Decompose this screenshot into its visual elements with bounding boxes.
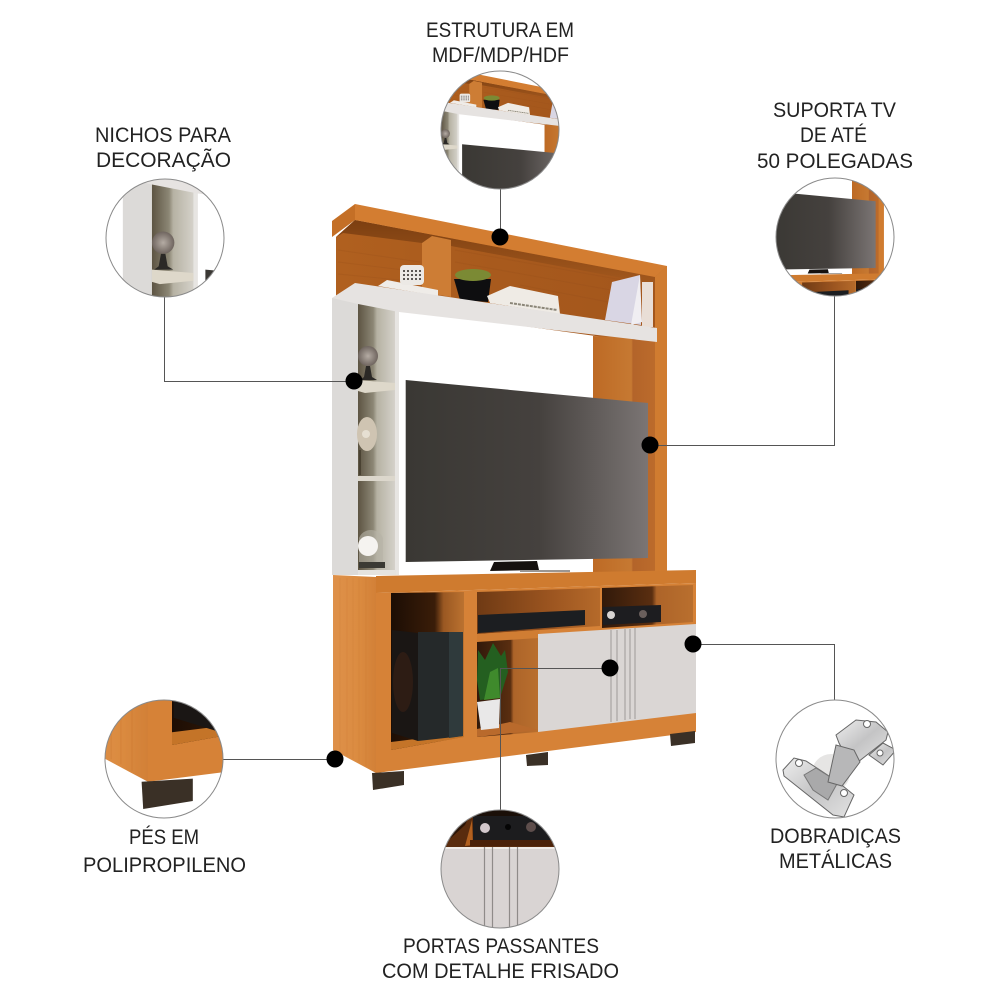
plant in white pot (477, 643, 508, 730)
callout dot: feet (326, 750, 344, 768)
detail circle: foot (104, 700, 224, 818)
heading: suporta tv: 50 POLEGADAS (757, 150, 913, 173)
right post (593, 266, 667, 572)
heading: estrutura: ESTRUTURA EM (426, 19, 574, 42)
sliding doors (538, 624, 696, 732)
callout dot: niches (346, 372, 362, 390)
cabinet front frame (376, 583, 696, 773)
middle shelf (477, 630, 540, 642)
subwoofer speaker (392, 630, 463, 741)
detail circle: TV (776, 178, 894, 296)
TV screen (406, 380, 648, 562)
stacked books (487, 286, 560, 314)
callout dot: TV (642, 436, 658, 454)
callout: dobradicas (770, 700, 901, 873)
heading: nichos: DECORAÇÃO (96, 148, 231, 172)
callout: estrutura (428, 22, 572, 190)
detail circle: niche with globe (106, 178, 224, 298)
hutch underside shadow (336, 220, 655, 284)
hutch divider (422, 236, 451, 297)
feet (372, 731, 695, 790)
shell ornament (357, 417, 377, 475)
heading: estrutura (426, 19, 574, 67)
heading: nichos (95, 124, 231, 172)
DVD player (478, 610, 585, 633)
heading: dobradicas (770, 825, 901, 873)
TV stand foot (490, 561, 539, 571)
lower cabinet (333, 570, 696, 773)
heading: suporta tv: DE ATÉ (800, 124, 867, 147)
callout: pes (84, 700, 245, 872)
hutch back panel (336, 220, 660, 345)
heading: suporta tv: SUPORTA TV (773, 99, 896, 122)
heading: pes: POLIPROPILENO (83, 854, 246, 877)
heading: pes (83, 826, 246, 877)
detail circle: door grooves (440, 808, 565, 930)
right top niche (602, 585, 693, 628)
heading: nichos: NICHOS PARA (95, 124, 231, 147)
heading: portas (382, 935, 619, 983)
callout: nichos (96, 128, 231, 298)
callout dot: structure (492, 228, 508, 246)
white niche tower (332, 298, 399, 575)
hutch top board (332, 204, 667, 282)
callout: portas (382, 808, 619, 983)
furniture: TV stand with hutch (332, 204, 696, 790)
detail circle: hutch (440, 70, 560, 190)
heading: dobradicas: METÁLICAS (779, 850, 892, 873)
heading: suporta tv (757, 99, 913, 173)
callout: suporta tv (758, 102, 912, 296)
left niche (391, 592, 464, 750)
heading: pes: PÉS EM (129, 826, 199, 849)
potted plant on shelf (454, 269, 491, 302)
lower middle niche (477, 638, 538, 737)
middle top niche (477, 588, 600, 634)
white shelf (332, 283, 657, 342)
heading: estrutura: MDF/MDP/HDF (432, 44, 569, 67)
small decorated box (378, 265, 438, 296)
detail circle: hinge (776, 700, 896, 818)
globe ornament (358, 346, 378, 380)
heading: portas: COM DETALHE FRISADO (382, 960, 619, 983)
heading: portas: PORTAS PASSANTES (403, 935, 599, 958)
cabinet side (333, 575, 376, 773)
upright books (605, 275, 653, 327)
cabinet top (376, 570, 696, 593)
glass dome ornament (358, 530, 385, 568)
callout dot: hinges (684, 636, 702, 652)
callout dot: doors (602, 660, 618, 676)
soundbar (603, 605, 661, 625)
leader lines (164, 189, 834, 810)
heading: dobradicas: DOBRADIÇAS (770, 825, 901, 848)
